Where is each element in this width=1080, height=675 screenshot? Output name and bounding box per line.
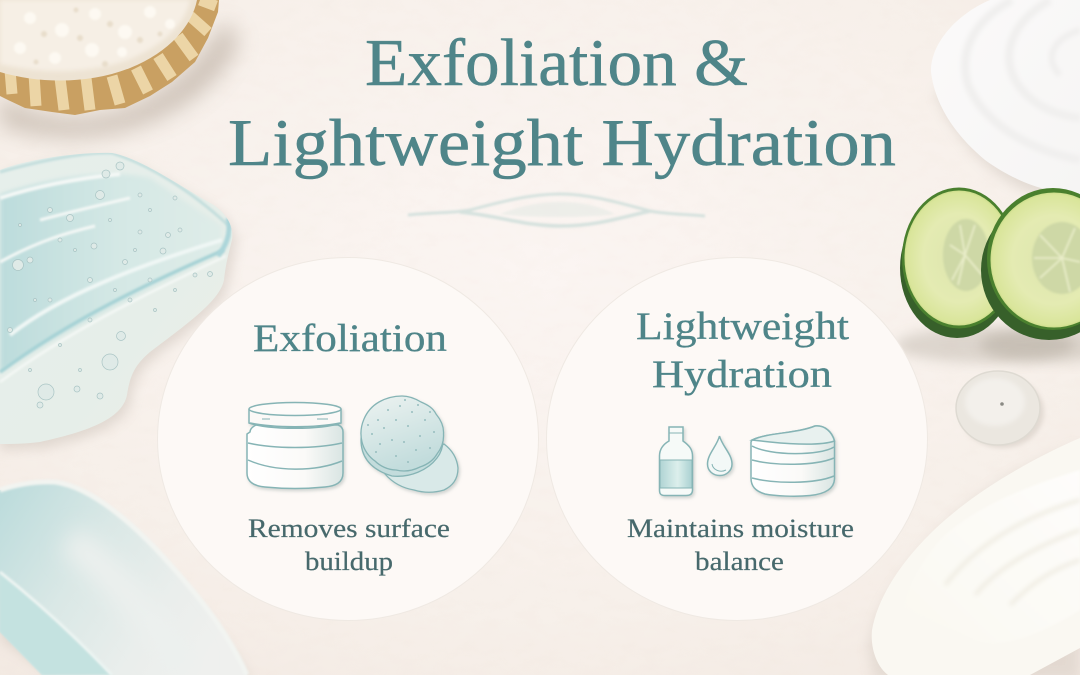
left slice [900, 188, 1016, 338]
photo: clear gel droplet [956, 371, 1044, 448]
panel heading: Exfoliation: Exfoliation [253, 317, 447, 360]
panel: lightweight hydration [546, 258, 928, 620]
right slice [981, 188, 1080, 340]
icon: cream jar [751, 426, 834, 496]
title: Exfoliation & [365, 26, 748, 100]
description: removes surface buildup: buildup [305, 547, 393, 576]
icon: bottle [660, 427, 692, 496]
icon: exfoliating pads [361, 396, 458, 492]
description: removes surface buildup [248, 514, 450, 576]
photo: white cream swirl [931, 0, 1080, 202]
photo: clear gel smear with bubbles [0, 153, 236, 450]
photo: blue gel swatch [0, 482, 252, 675]
description: removes surface buildup: Removes surface [248, 514, 450, 543]
panel heading: Lightweight Hydration [636, 305, 849, 396]
icon: jar [247, 402, 343, 488]
photo: cucumber slices [895, 188, 1080, 363]
panel heading: Lightweight Hydration: Hydration [652, 353, 832, 396]
decorative wave divider under the title [408, 194, 705, 226]
panel: exfoliation [158, 258, 538, 620]
title [228, 26, 896, 180]
icon: water drop [708, 436, 732, 476]
description: maintains moisture balance: balance [695, 547, 784, 576]
description: maintains moisture balance: Maintains moisture [627, 514, 854, 543]
description: maintains moisture balance [627, 514, 854, 576]
photo: dry brush with bristles [0, 0, 240, 138]
title: Lightweight Hydration [228, 106, 896, 180]
photo: white lotion smear [868, 438, 1080, 675]
panel heading: Lightweight Hydration: Lightweight [636, 305, 849, 348]
